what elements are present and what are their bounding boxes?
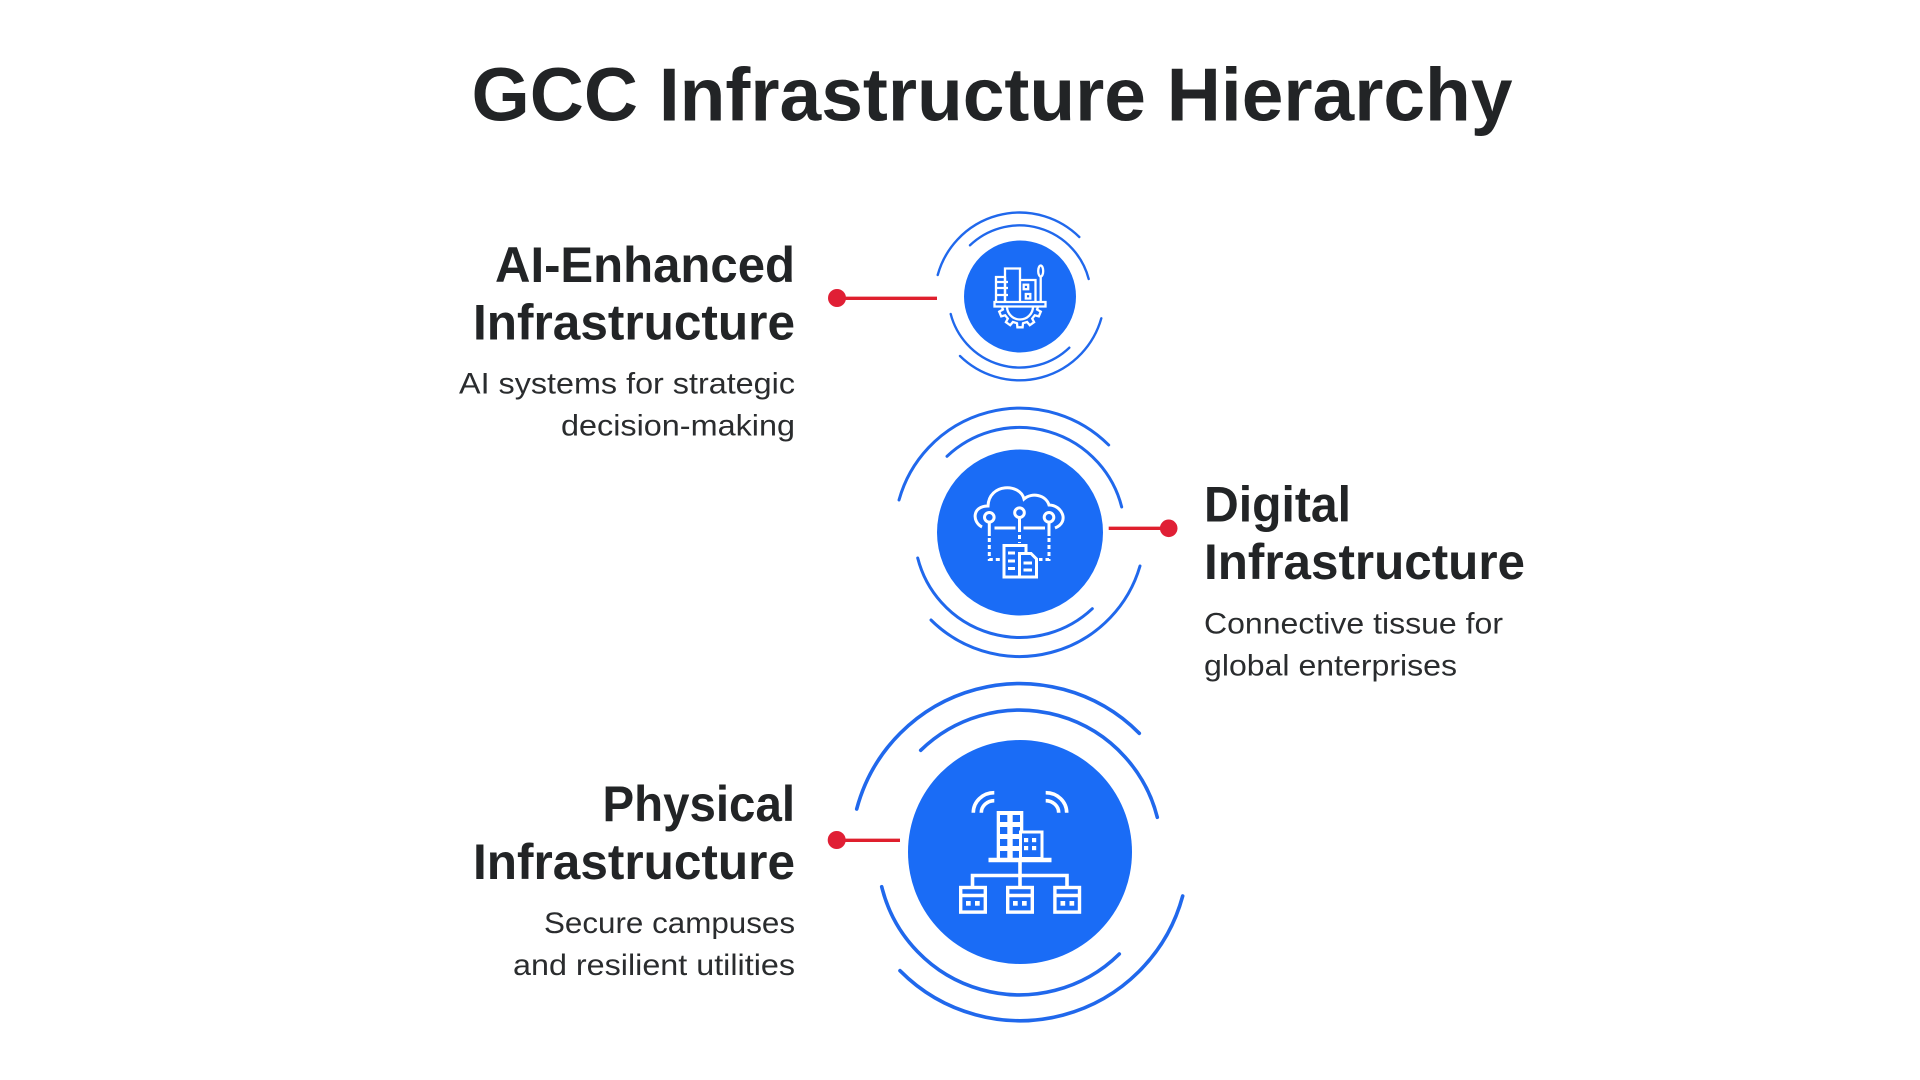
heading: AI-Enhanced Infrastructure: AI-Enhanced bbox=[495, 237, 795, 293]
heading: Physical Infrastructure bbox=[473, 776, 795, 890]
heading: Physical Infrastructure: Physical bbox=[602, 776, 795, 832]
title: GCC Infrastructure Hierarchy bbox=[472, 52, 1513, 136]
panel: Digital Infrastructure bbox=[899, 408, 1525, 682]
concentric arcs: medium bbox=[899, 408, 1140, 656]
blue circle: small bbox=[964, 240, 1076, 352]
blue circle: large bbox=[908, 740, 1132, 964]
icon: cloud with linked documents bbox=[975, 488, 1063, 577]
wifi signals bbox=[973, 793, 1067, 813]
description: secure campuses: and resilient utilities bbox=[513, 949, 795, 982]
description: connective tissue: global enterprises bbox=[1204, 650, 1457, 682]
description: AI systems bbox=[459, 368, 795, 442]
connector: red line and dot bbox=[828, 289, 937, 307]
icon: gear with city buildings bbox=[994, 266, 1046, 327]
description: secure campuses bbox=[513, 907, 795, 982]
network lines bbox=[972, 860, 1067, 886]
connector: red line and dot bbox=[1109, 520, 1177, 537]
description: secure campuses: Secure campuses bbox=[544, 907, 795, 940]
description: connective tissue bbox=[1204, 608, 1503, 682]
connector: red line and dot bbox=[828, 831, 900, 849]
concentric arcs: large bbox=[857, 684, 1183, 1021]
heading: Digital Infrastructure: Infrastructure bbox=[1204, 534, 1525, 590]
icon: buildings with network bbox=[961, 793, 1080, 912]
description: connective tissue: Connective tissue for bbox=[1204, 608, 1503, 640]
heading: Physical Infrastructure: Infrastructure bbox=[473, 834, 795, 890]
node box dots bbox=[966, 901, 1074, 906]
node boxes bbox=[961, 888, 1080, 912]
heading: AI-Enhanced Infrastructure bbox=[473, 237, 795, 350]
blue circle: medium bbox=[937, 450, 1103, 616]
heading: Digital Infrastructure bbox=[1204, 476, 1525, 590]
panel: Physical Infrastructure bbox=[473, 684, 1183, 1021]
tall building bbox=[997, 811, 1023, 858]
description: AI systems: decision-making bbox=[561, 410, 795, 442]
panel: AI-Enhanced Infrastructure bbox=[459, 213, 1101, 442]
concentric arcs: small bbox=[938, 213, 1101, 380]
heading: Digital Infrastructure: Digital bbox=[1204, 476, 1351, 532]
heading: AI-Enhanced Infrastructure: Infrastructure bbox=[473, 294, 795, 350]
short building bbox=[1020, 832, 1042, 858]
description: AI systems: AI systems for strategic bbox=[459, 368, 795, 400]
